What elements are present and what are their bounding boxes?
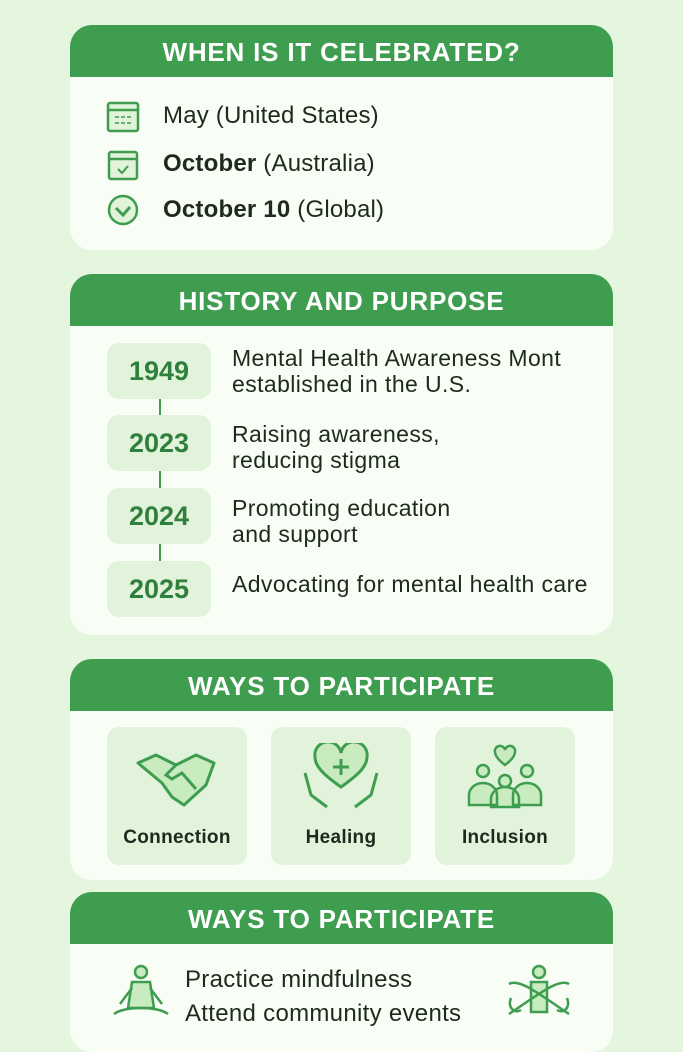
text: October 10: October 10 (Global) (163, 196, 384, 223)
card: healing (271, 727, 411, 865)
card: inclusion (435, 727, 575, 865)
desc 1949: Mental Health Awareness Mont (232, 345, 561, 371)
icon: calendar (106, 102, 140, 132)
icon: check circle (108, 194, 138, 226)
year 2024 (107, 488, 211, 544)
text: May: May (United States) (163, 102, 379, 129)
heading: HISTORY AND PURPOSE (179, 286, 504, 316)
year 2023: 2023 (129, 428, 189, 458)
panel: history and purpose (70, 274, 613, 635)
card: healing: Healing (306, 827, 376, 848)
heading: WAYS TO PARTICIPATE (188, 671, 495, 701)
desc 2024: Promoting education (232, 495, 451, 521)
card: connection (107, 727, 247, 865)
year 2023 (107, 415, 211, 471)
icon: figure (508, 964, 570, 1015)
desc 2024 (232, 495, 451, 547)
desc 2024: and support (232, 521, 358, 547)
desc 2023 (232, 421, 440, 473)
desc 1949: established in the U.S. (232, 371, 471, 397)
panel: ways to participate cards (70, 659, 613, 880)
year 1949 (107, 343, 211, 399)
card: connection: Connection (123, 827, 231, 848)
text: activities: Practice mindfulness (185, 966, 412, 993)
heading: WAYS TO PARTICIPATE (188, 904, 495, 934)
icon: meditation (113, 964, 169, 1015)
desc 1949 (232, 345, 561, 397)
heading (70, 659, 613, 711)
desc 2023: reducing stigma (232, 447, 400, 473)
heading (70, 892, 613, 944)
heading (70, 25, 613, 77)
desc 2025: Advocating for mental health care (232, 571, 588, 597)
text: activities (185, 966, 461, 1027)
panel: ways to participate list (70, 892, 613, 1052)
desc 2023: Raising awareness, (232, 421, 440, 447)
icon: calendar check (108, 150, 138, 180)
text: October Australia: October (Australia) (163, 150, 375, 177)
year 1949: 1949 (129, 356, 189, 386)
year 2025 (107, 561, 211, 617)
heading (70, 274, 613, 326)
heading: WHEN IS IT CELEBRATED? (162, 37, 520, 67)
year 2025: 2025 (129, 574, 189, 604)
panel: when is it celebrated (70, 25, 613, 250)
card: inclusion: Inclusion (462, 827, 548, 848)
year 2024: 2024 (129, 501, 189, 531)
text: activities: Attend community events (185, 1000, 461, 1027)
